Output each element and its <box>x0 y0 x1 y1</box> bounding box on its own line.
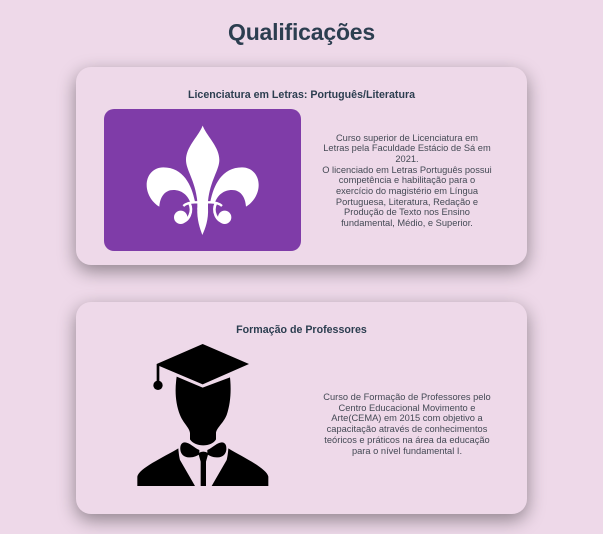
heading: Licenciatura: Licenciatura em Letras: Português/Literatura <box>188 89 415 101</box>
title: Qualificações <box>228 19 375 45</box>
icon: purple fleur-de-lis <box>104 109 301 251</box>
text: Formação description <box>323 392 491 456</box>
text: Licenciatura description: exercício do magistério em Língua <box>336 186 478 196</box>
text: Formação description: teóricos e práticos na área da educação <box>324 435 490 445</box>
text: Formação description: Centro Educacional Movimento e <box>339 403 475 413</box>
heading: Formação: Formação de Professores <box>236 324 367 336</box>
text: Licenciatura description: competência e habilitação para o <box>339 175 475 185</box>
text: Licenciatura description: Portuguesa, Literatura, Redação e <box>336 197 478 207</box>
panel: Formação <box>76 302 527 514</box>
text: Licenciatura description: fundamental, Médio, e Superior. <box>341 218 473 228</box>
icon: graduate with mortarboard <box>137 344 268 486</box>
text: Formação description: capacitação através de conhecimentos <box>327 424 487 434</box>
text: Formação description: Arte(CEMA) em 2015 com objetivo a <box>331 413 483 423</box>
panel: Licenciatura <box>76 67 527 265</box>
text: Formação description: para o nível fundamental I. <box>352 446 462 456</box>
text: Licenciatura description: 2021. <box>395 154 419 164</box>
text: Licenciatura description <box>322 132 492 228</box>
text: Licenciatura description: Letras pela Faculdade Estácio de Sá em <box>323 143 491 153</box>
text: Licenciatura description: Curso superior de Licenciatura em <box>336 132 478 142</box>
text: Licenciatura description: Produção de Texto nos Ensino <box>344 207 470 217</box>
text: Licenciatura description: O licenciado em Letras Português possui <box>322 165 492 175</box>
text: Formação description: Curso de Formação de Professores pelo <box>323 392 491 402</box>
